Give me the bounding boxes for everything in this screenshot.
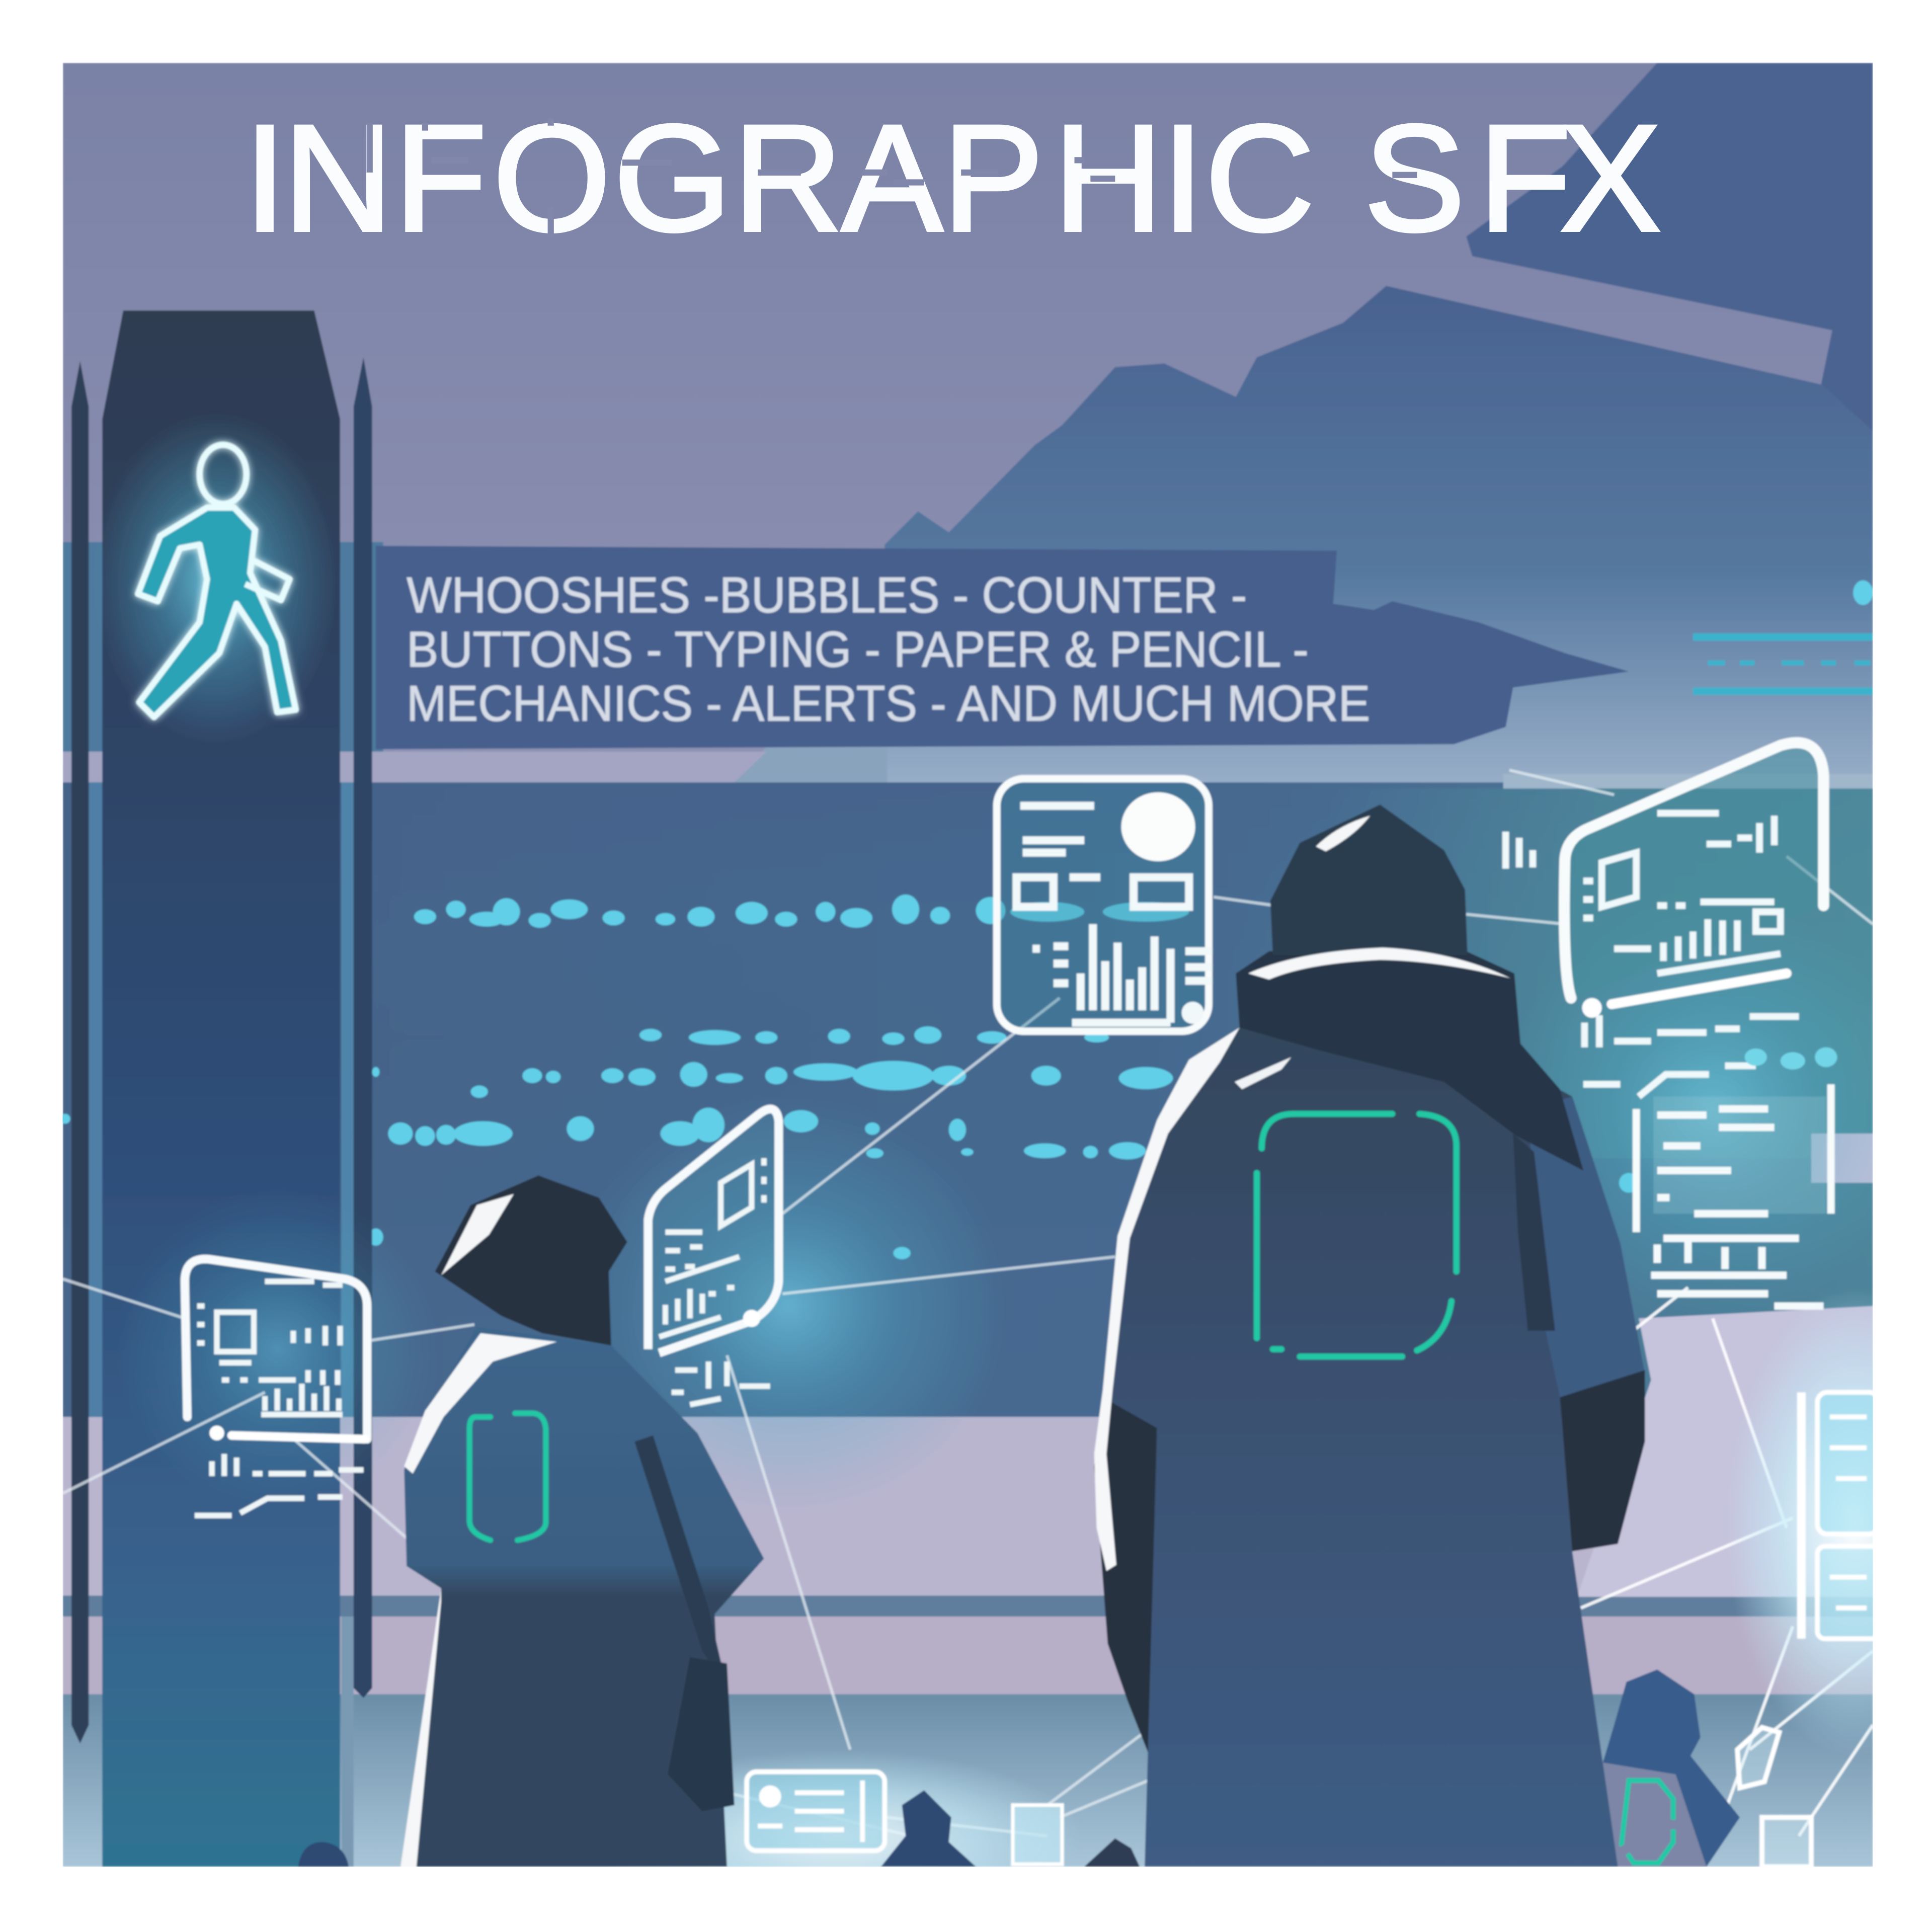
title: INFOGRAPHIC SFX	[244, 93, 1661, 263]
pillar right light edge	[341, 782, 354, 1417]
list line 3: MECHANICS - ALERTS - AND MUCH MORE	[407, 676, 1370, 732]
lower foreground floor	[63, 1694, 1873, 1867]
distant figure centre right	[1084, 1838, 1140, 1867]
sign pillar	[102, 310, 340, 1867]
coat side highlight	[400, 1588, 441, 1867]
green frame	[1257, 1114, 1457, 1356]
mid wall band	[63, 782, 1873, 1417]
bottom center glow	[592, 1750, 1084, 1922]
shoulder rim light	[1094, 1027, 1240, 1571]
hood highlight	[1316, 816, 1370, 851]
coat	[400, 1327, 764, 1867]
list line 2: BUTTONS - TYPING - PAPER & PENCIL -	[407, 621, 1309, 678]
icon: neon walking figure	[138, 445, 296, 717]
coat	[1103, 1027, 1645, 1867]
bag	[668, 1657, 735, 1811]
list line 1: WHOOSHES -BUBBLES - COUNTER -	[407, 567, 1247, 623]
chest highlight	[1235, 1057, 1292, 1089]
green frame	[469, 1413, 546, 1540]
small screen panel bottom center	[747, 1772, 884, 1850]
pillar left light edge	[89, 782, 102, 1417]
data dots	[60, 580, 1873, 1259]
right glove	[1560, 1370, 1645, 1551]
scarf collar	[1236, 951, 1583, 1171]
stencil cuts in title	[370, 118, 1417, 236]
glow far right	[1725, 1287, 1932, 1756]
screen panel lower right	[1636, 1084, 1831, 1306]
left wall strip	[63, 542, 383, 752]
pale strip under banner	[63, 752, 766, 782]
right teal glow	[1503, 900, 1922, 1318]
distant mountain silhouette	[884, 286, 1873, 801]
right light strip	[1503, 774, 1873, 788]
screen panel right	[1506, 743, 1837, 1097]
small screen panel bottom right	[1737, 1727, 1811, 1867]
mid wall tint	[63, 782, 1873, 1417]
distant figure right	[1589, 1669, 1740, 1867]
lavender right block	[1577, 1306, 1873, 1597]
bright connector lines right	[1581, 1287, 1873, 1836]
teal data lines right	[1693, 637, 1873, 691]
upper right dark shape	[1466, 63, 1873, 431]
connector lines	[63, 770, 1873, 1836]
lavender patch behind panel	[1811, 1134, 1873, 1183]
right side post	[354, 357, 372, 1698]
floor stripe	[63, 1595, 1873, 1617]
walker glow	[93, 413, 339, 746]
lavender floor band	[63, 1417, 1873, 1597]
screen panel middle-left	[648, 1109, 779, 1405]
glow behind left panel	[117, 1189, 437, 1509]
arm shadow strap	[634, 1435, 727, 1688]
head	[435, 1175, 627, 1345]
left side post	[71, 361, 89, 1743]
collar highlight	[1248, 947, 1510, 980]
right teal wall tint	[1331, 788, 1873, 1158]
left arm and glove	[1094, 1397, 1158, 1759]
visor highlight	[441, 1194, 514, 1275]
screen panel far right	[1801, 1392, 1879, 1639]
strip right of pale band	[735, 747, 887, 788]
small figure	[400, 1175, 764, 1867]
white circle on center panel	[1121, 792, 1195, 861]
right sleeve	[1528, 1097, 1645, 1397]
distant figure center	[881, 1790, 976, 1867]
shoulder highlight	[404, 1333, 557, 1474]
screen panel center	[997, 779, 1213, 1031]
lavender lower band	[63, 1617, 1873, 1694]
screen panel left	[185, 1259, 367, 1515]
list of sound effects	[407, 567, 1370, 732]
hood	[1270, 804, 1468, 955]
banner behind list	[376, 546, 1629, 749]
pillar lower light edge	[341, 1617, 354, 1867]
distant figure left	[298, 1842, 349, 1867]
back seam shadow	[1513, 1134, 1555, 1331]
large figure	[1094, 804, 1645, 1867]
small screen panel bottom mid	[1013, 1805, 1062, 1864]
central cyan glow	[567, 1097, 1010, 1515]
sky background	[63, 63, 1873, 802]
